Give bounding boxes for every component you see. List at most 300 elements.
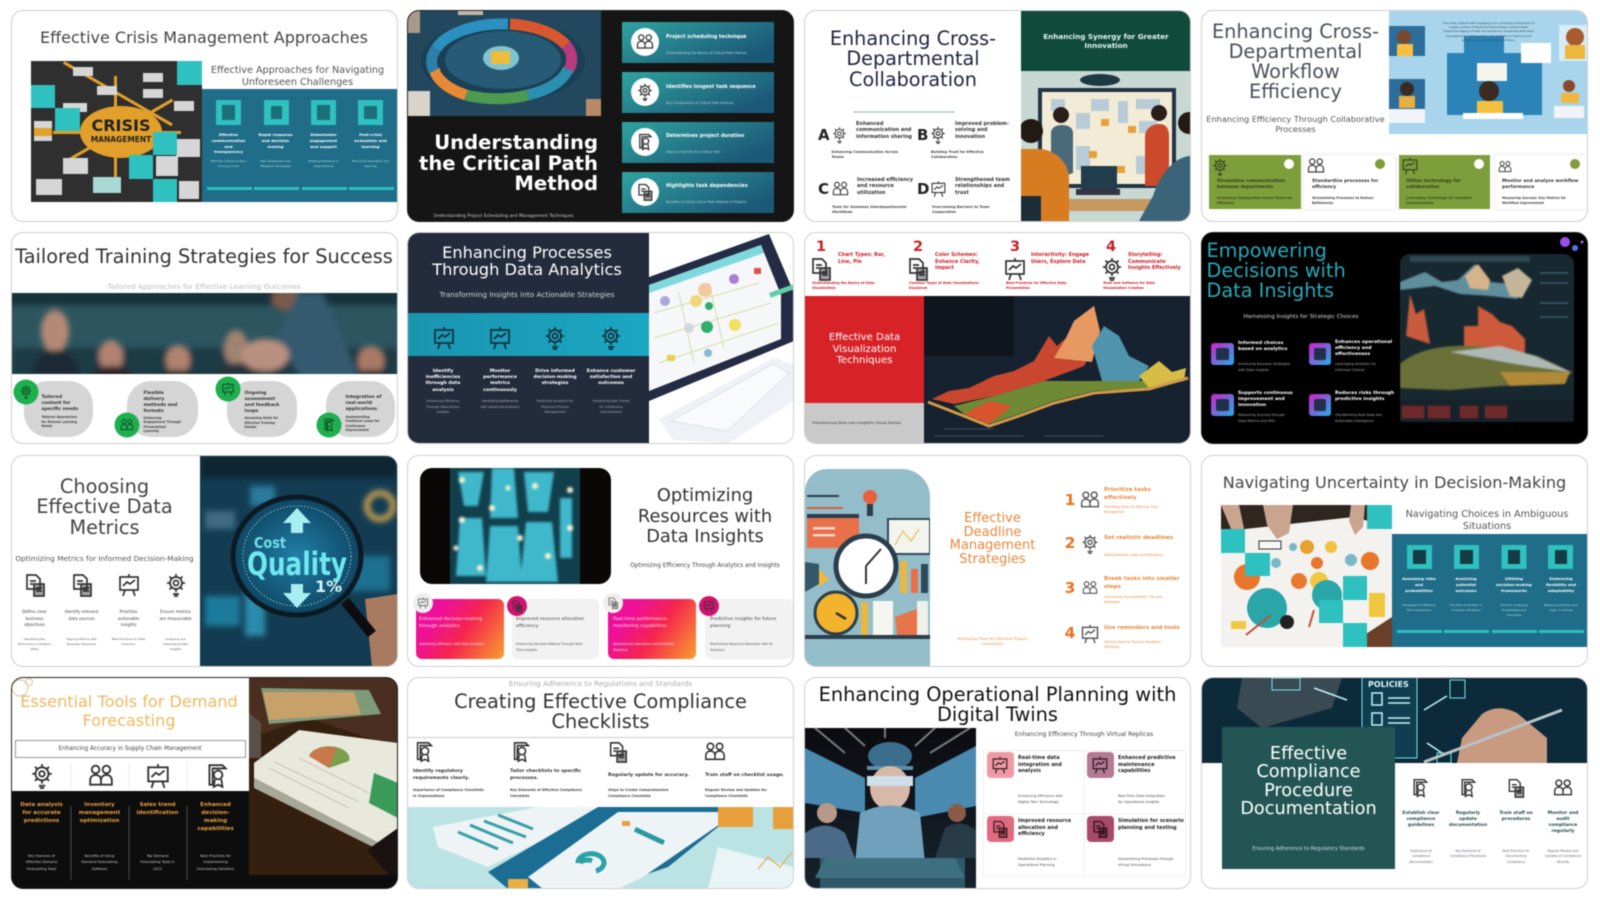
icon 2 — [1080, 534, 1100, 554]
text 4: Monitor and analyze workflow performance — [1502, 179, 1578, 190]
icon C — [832, 180, 849, 196]
icon 3 — [1004, 257, 1026, 281]
icon 3 — [545, 326, 564, 350]
card 4 — [705, 599, 793, 659]
sub C: Tools for Seamless Interdepartmental Workflows — [832, 205, 906, 214]
panel: Effective Compliance Procedure Documentation — [1201, 677, 1588, 888]
panel: Enhancing Cross-Departmental Workflow Efficiency — [1201, 10, 1588, 222]
sub 2: Enhancing Decision-Making Through Real- Time Insights — [516, 642, 583, 652]
title: Understanding the Critical Path Method — [419, 131, 598, 195]
item 2 sub: Setting Realistic Goals and Milestones — [1104, 553, 1163, 557]
sub D: Overcoming Barriers to Team Cooperation — [932, 205, 990, 214]
upper white area — [12, 678, 248, 791]
title: Essential Tools for Demand Forecasting — [20, 692, 238, 730]
image: magnifier with Quality: Cost — [254, 534, 286, 552]
image: magnifier with Quality — [200, 456, 398, 667]
list sub 1: Understanding the Basics of Critical Path Method — [666, 51, 747, 55]
label 4: Monitor and audit compliance regularly — [1548, 811, 1578, 834]
label 1: Establish clear compliance guidelines — [1402, 811, 1440, 828]
icon 2 — [88, 763, 114, 789]
photo: mind map on desk — [1221, 505, 1392, 647]
sub 1: Optimizing Efficiency with Data Analytics — [419, 642, 485, 646]
sub 3: Streamlining Operations via Predictive Modeling — [613, 642, 674, 652]
panel: teal columns: The Role of Intuition in Uncertain Situations — [1450, 603, 1482, 612]
item 4: Train staff on checklist usage. — [705, 773, 784, 778]
gradient icons — [1210, 342, 1332, 417]
icon tile 1 — [987, 752, 1014, 778]
sub 2: Benefits of Using Demand Forecasting Software — [81, 854, 118, 871]
labels: Assessing risks and probabilities — [1402, 576, 1436, 593]
icon 4 — [1498, 160, 1512, 173]
item B: Improved problem- solving and innovation — [955, 121, 1009, 140]
text 1: Enhanced decision-making through analytics — [419, 617, 482, 629]
icon 2 — [1307, 158, 1325, 174]
header text: Enhancing Synergy for Greater Innovation — [1043, 32, 1169, 50]
list text 2: Identifies longest task sequence — [666, 84, 756, 90]
item 3 sub: Assessing Skills for Effective Training Design — [244, 416, 278, 429]
sub 2: Key Elements of Compliance Procedures — [1450, 849, 1486, 858]
item 2: Set realistic deadlines — [1104, 535, 1173, 541]
number 3: 3 — [1065, 579, 1075, 597]
item 1: Chart Types: Bar, Line, Pie — [838, 252, 885, 264]
item 3: Ongoing assessment and feedback loops — [244, 391, 279, 414]
sub 1: Understanding the Basics of Data Visualization — [812, 281, 875, 290]
icon 4 — [1553, 778, 1573, 798]
photo: open report on desk — [248, 678, 398, 875]
icon 3 — [607, 597, 619, 609]
list sub 2: Key Components of Critical Path Analysis — [666, 101, 734, 105]
image: magnifier with Quality: Quality — [246, 545, 347, 583]
panel: teal columns: Post-Crisis Evaluation and Learning — [352, 159, 389, 168]
title: Enhancing Processes Through Data Analytics — [432, 243, 622, 279]
icon 4 — [1080, 624, 1100, 644]
subtitle: Transforming Insights into Actionable Strategies — [439, 290, 615, 299]
badges — [408, 591, 794, 621]
icon 1 — [1212, 158, 1228, 176]
label 1: Data analysis for accurate predictions — [20, 802, 63, 824]
image: magnifier with Quality: 1% — [314, 577, 342, 596]
icon 2 — [1091, 756, 1109, 774]
list sub 4: Benefits of Using Critical Path Method in Projects — [666, 200, 746, 204]
photo: glowing policies: POLICIES — [1368, 680, 1409, 689]
icon 4 — [704, 741, 726, 763]
label 4: Ensure metrics are measurable — [159, 609, 192, 620]
title panel — [1222, 727, 1395, 869]
sub 3: Steps to Create Comprehensive Compliance Checklists — [608, 788, 669, 798]
image: ring diagram — [407, 10, 602, 117]
letter B: B — [917, 126, 928, 144]
item 4: Reduces risks through predictive insights — [1335, 391, 1394, 402]
item 2: Tailor checklists to specific processes. — [510, 769, 581, 781]
title: Choosing Effective Data Metrics — [36, 475, 173, 539]
sublabel 2: Identifying Bottlenecks with Advanced Analytics — [480, 399, 520, 409]
title: Tailored Training Strategies for Success — [15, 245, 393, 268]
title: Effective Crisis Management Approaches — [40, 28, 368, 47]
card 3 — [1399, 155, 1490, 209]
sub 3: Top Demand Forecasting Tools in 2023 — [140, 854, 175, 871]
icon on bar 1 — [636, 34, 654, 50]
item 1: Informed choices based on analytics — [1238, 341, 1287, 352]
label: crisis text: CRISIS — [91, 116, 150, 135]
photo: glowing policies — [1202, 678, 1588, 763]
title: Effective Deadline Management Strategies — [950, 511, 1035, 567]
sublabels: Strategies for Effective Risk Assessment — [1402, 603, 1436, 612]
item 4: Storytelling: Communicate Insights Effectively — [1128, 252, 1181, 271]
icon 3 — [1506, 778, 1526, 798]
subtitle: Harnessing Insights for Strategic Choices — [1243, 314, 1359, 320]
item 2 sub: Real-Time Data Integration for Operational Insights — [1118, 794, 1165, 804]
item 2: Flexible delivery methods and formats — [144, 391, 177, 414]
title: Effective Compliance Procedure Documentation — [1240, 744, 1377, 819]
illustration: monitor and keyboard — [648, 234, 794, 443]
teal band — [408, 313, 649, 356]
decorative circles — [1559, 236, 1584, 252]
panel: Effective Data Visualization Techniques — [804, 232, 1191, 444]
item 2: Color Schemes: Enhance Clarity, Impact — [935, 252, 980, 271]
illustration: checklist tablet — [408, 807, 794, 889]
number 4: 4 — [1065, 624, 1075, 642]
letter markers: A — [818, 126, 830, 144]
list bars — [621, 21, 775, 214]
icon 1 — [434, 326, 454, 350]
checker squares — [30, 60, 203, 203]
sub 4: Tools and Software for Data Visualization Creation — [1103, 281, 1155, 290]
text 2: Standardize processes for efficiency — [1312, 179, 1378, 190]
item 3: Regularly update for accuracy. — [608, 773, 689, 778]
illustration: remote team — [1388, 10, 1588, 134]
item 1 sub: Tailored Approaches for Diverse Learning Needs — [42, 415, 77, 428]
card 2 — [1304, 155, 1395, 209]
item A: Enhanced communication and information sharing — [856, 121, 912, 140]
left background — [408, 233, 649, 444]
panel: teal columns: Analyzing potential outcomes — [1455, 576, 1477, 593]
sub 3: Best Practices for Data Collection — [112, 637, 145, 646]
panel: Empowering Decisions with Data Insights — [1201, 232, 1588, 444]
panel: teal columns: Balancing Emotion and Logic in Choices — [1544, 603, 1578, 612]
sub 3: Best Practices for Documenting Compliance — [1502, 849, 1530, 864]
item 2: Enhances operational efficiency and effectiveness — [1335, 340, 1392, 357]
icon 1 — [22, 573, 46, 597]
panel: teal columns: Rapid response and decision making — [259, 132, 292, 149]
icon 1 — [1080, 490, 1100, 510]
panel title: Effective Data Visualization Techniques — [829, 332, 900, 366]
icon 2 — [908, 257, 929, 282]
photo: crisis management — [30, 60, 203, 203]
icon tile 4 — [1087, 816, 1114, 842]
item 3 sub: Measuring Success through Data Metrics and KPIs — [1238, 413, 1285, 423]
label 3: Train staff on procedures — [1499, 811, 1533, 822]
sub 4: Best Practices for Implementing Forecasting Solutions — [197, 854, 234, 871]
item 3: Improved resource allocation and efficiency — [1018, 818, 1071, 837]
squares and bars — [1392, 534, 1588, 647]
sub A: Enhancing Communication Across Teams — [832, 150, 898, 159]
item 2 sub: Enhancing Engagement Through Personalized Learning — [144, 416, 181, 433]
panel: teal columns: Building Resilience in Organizations — [308, 159, 339, 168]
icon 4 — [164, 573, 188, 597]
item C: Increased efficiency and resource utilization — [857, 177, 913, 196]
icon A — [832, 126, 846, 144]
panel: teal columns: Stakeholder engagement and support — [310, 132, 337, 149]
text 3: Utilize technology for collaboration — [1406, 179, 1461, 190]
panel: Effective Crisis Management Approaches — [10, 10, 398, 222]
sub 4: Maximizing Resource Allocation with AI Solutions — [710, 642, 772, 652]
label 3: Sales trend identification — [137, 802, 178, 816]
icon tile 3 — [987, 816, 1014, 842]
illustration: clocks and charts — [805, 469, 930, 667]
sub 4: Regular Review and Updates for Compliance Checklists — [705, 788, 767, 798]
card 1 — [416, 599, 504, 659]
icon 2 — [490, 326, 510, 350]
icon 1 — [417, 597, 429, 609]
image: digital twin control room — [805, 728, 976, 888]
blob icon 2 — [120, 418, 134, 431]
panel: Optimizing Resources with Data Insights — [407, 455, 794, 666]
icon tile 2 — [1087, 752, 1114, 778]
subtitle: Effective Approaches for Navigating Unforeseen Challenges — [211, 65, 384, 88]
icon 3 — [1080, 580, 1100, 596]
panel: Choosing Effective Data Metrics — [10, 455, 398, 666]
item 3: Break tasks into smaller steps — [1104, 576, 1179, 590]
panel: Enhancing Operational Planning with Digital Twins — [804, 677, 1191, 888]
card 3 — [608, 599, 696, 659]
icon 4 — [204, 763, 230, 789]
number 4: 4 — [1106, 239, 1116, 255]
list text 3: Determines project duration — [666, 133, 744, 139]
subtitle: Enhancing Efficiency Through Virtual Replicas — [1015, 731, 1153, 738]
item 4 sub: Implementing Feedback Loops for Continuous Improvement — [346, 415, 380, 432]
sub 2: Common Types of Data Visualizations Explained — [909, 281, 979, 290]
blob icon 4 — [324, 418, 335, 432]
card 1 — [1209, 155, 1300, 209]
icon D — [930, 180, 946, 198]
icon 1 — [811, 257, 832, 282]
icon 4 — [601, 326, 621, 350]
icon 3 — [991, 820, 1009, 838]
blobs — [12, 376, 396, 438]
icon 2 — [511, 600, 523, 612]
sub 1: Identifying Key Performance Indicators (KPIs) — [18, 637, 51, 651]
item 1 sub: Prioritizing Tasks for Effective Time Management — [1104, 505, 1158, 514]
icon 2 — [510, 741, 532, 763]
text 3: Real-time performance monitoring capabilities — [613, 617, 667, 629]
panel: teal columns: Embracing flexibility and adaptability — [1546, 576, 1576, 593]
divider — [408, 736, 794, 738]
panel: teal columns: Post-crisis evaluation and learning — [354, 132, 387, 149]
image: 3D data landscape — [923, 295, 1191, 444]
item D: Strengthened team relationships and trust — [955, 177, 1010, 196]
sublabel 3: Predictive Analytics for Proactive Process Management — [537, 399, 573, 414]
panel: Navigating Uncertainty in Decision-Making — [1201, 455, 1588, 666]
item 4: Simulation for scenario planning and testing — [1118, 818, 1184, 831]
label 4: Enhanced decision- making capabilities — [197, 802, 234, 832]
text 2: Improved resource allocation efficiency — [516, 617, 584, 629]
sublabels: Effective Communication During a Crisis — [210, 159, 247, 168]
list text 4: Highlights task dependencies — [666, 183, 748, 189]
item 1: Identify regulatory requirements clearly. — [413, 769, 469, 781]
top caption: Ensuring Adherence to Regulations and Standards — [509, 678, 692, 688]
image: analytics dashboard — [1399, 254, 1574, 422]
divider — [853, 111, 955, 112]
sub B: Building Trust for Effective Collaboration — [931, 150, 984, 159]
footer: Understanding Project Scheduling and Management Techniques — [434, 214, 574, 219]
photo: pointing businessman — [11, 292, 398, 375]
subtitle: Optimizing Metrics for Informed Decision-Making — [15, 554, 194, 563]
label 4: Enhance customer satisfaction and outcomes — [587, 369, 635, 386]
gray text: Transforming Data into Insightful Visual Stories — [812, 420, 901, 425]
illustration: team at whiteboard — [1020, 70, 1191, 222]
title: Creating Effective Compliance Checklists — [454, 690, 747, 733]
icon 4 — [1091, 820, 1109, 838]
item 3: Interactivity: Engage Users, Explore Data — [1031, 252, 1089, 264]
panel: teal columns — [1392, 534, 1588, 647]
sub 1: Importance of Compliance Checklists in Organizations — [413, 788, 484, 798]
card 2 — [512, 599, 599, 659]
label 2: Inventory management optimization — [79, 802, 120, 824]
image: glass bottles — [420, 468, 611, 584]
subtitle: Tailored Approaches for Effective Learning Outcomes — [107, 282, 301, 291]
decorative rings — [12, 678, 36, 698]
sub 3: Best Practices for Effective Data Presentation — [1006, 281, 1066, 290]
panel: teal columns: Tools for Analyzing Probabilities and Outcomes — [1500, 603, 1528, 617]
column dividers — [12, 763, 248, 883]
panel: Tailored Training Strategies for Success — [10, 232, 398, 444]
blob icon 1 — [20, 385, 32, 400]
label 1: Identify inefficiencies through data analysis — [426, 369, 460, 393]
subtitle: Mastering Time for Effective Project Completion — [958, 636, 1027, 646]
column 1 to 4 squares and bars — [206, 100, 394, 190]
panel: Enhancing Processes Through Data Analytics — [407, 232, 794, 444]
icon 1 — [991, 756, 1009, 774]
card 4 — [1495, 155, 1587, 209]
checker squares — [1202, 456, 1588, 666]
title: Empowering Decisions with Data Insights — [1206, 239, 1346, 302]
item 4: Integration of real-world applications — [346, 395, 381, 412]
panel: teal columns — [202, 89, 398, 202]
item 1 sub: Enhancing Business Strategies with Data Insights — [1238, 362, 1290, 372]
icon 4 — [1102, 257, 1122, 282]
icon 1 — [1410, 778, 1430, 798]
item 4 sub: Transforming Raw Data into Actionable Intelligence — [1335, 413, 1382, 423]
badges — [1283, 158, 1581, 170]
item 1: Prioritize tasks effectively — [1104, 487, 1151, 501]
blob icon 3 — [222, 382, 234, 396]
letter C: C — [818, 180, 829, 198]
panel: Enhancing Cross-Departmental Collaboration — [804, 10, 1191, 222]
list sub 3: Steps to Identify the Critical Path — [666, 150, 720, 154]
sub 1: Key Features of Effective Demand Forecasting Tools — [26, 854, 57, 871]
subtitle: Optimizing Efficiency Through Analytics and Insights — [630, 563, 780, 569]
subtitle box: Enhancing Accuracy in Supply Chain Management — [58, 746, 202, 752]
icon B — [930, 126, 946, 145]
icon 1 — [413, 741, 435, 763]
sub 1: Importance of Compliance Documentation — [1409, 849, 1433, 864]
item 1: Tailored content for specific needs — [42, 395, 78, 412]
sub 3: Leveraging Technology for Seamless Communication — [1406, 196, 1472, 205]
label 2: Monitor performance metrics continuously — [483, 369, 517, 393]
icon 2 — [638, 83, 652, 102]
title: Enhancing Cross- Departmental Workflow Efficiency — [1212, 20, 1379, 103]
number 2: 2 — [913, 239, 923, 255]
sub 2: Key Elements of Effective Compliance Checklists — [510, 788, 582, 798]
title: Optimizing Resources with Data Insights — [638, 485, 772, 547]
sub 4: Measuring Success: Key Metrics for Workflow Improvement — [1502, 196, 1566, 205]
sub 1: Enhancing Collaboration Across Teams for Efficiency — [1217, 196, 1293, 205]
panel: teal columns: Risk Assessment and Mitigation Strategies — [260, 159, 291, 168]
grid frame — [982, 750, 1186, 877]
grid lines — [982, 750, 1186, 877]
icon 4 — [638, 183, 654, 202]
title: Enhancing Operational Planning with Digital Twins — [819, 683, 1176, 726]
subtitle: Enhancing Efficiency Through Collaborative Processes — [1206, 114, 1385, 134]
icon 2 — [1458, 778, 1478, 798]
item 1 sub: Enhancing Efficiency with Digital Twin Technology — [1018, 794, 1063, 804]
icon 2 — [70, 573, 94, 597]
panel: teal columns: Utilizing decision-making frameworks — [1496, 576, 1532, 593]
subtitle box — [14, 740, 246, 758]
label 1: Define clear business objectives — [22, 609, 47, 627]
title: Enhancing Cross- Departmental Collaboration — [830, 27, 996, 91]
list text 1: Project scheduling technique — [666, 34, 746, 40]
item 4 sub: Streamlining Processes through Virtual Simulations — [1118, 857, 1173, 867]
icon 3 — [638, 133, 653, 151]
panel: Creating Effective Compliance Checklists — [407, 677, 794, 888]
number 1: 1 — [1065, 491, 1075, 509]
sublabel 1: Enhancing Efficiency Through Data-Driven Insights — [426, 399, 460, 414]
label: crisis text: MANAGEMENT — [90, 135, 152, 144]
number 2: 2 — [1065, 534, 1075, 552]
label 3: Drive informed decision-making strategies — [533, 369, 577, 386]
label 2: Regularly update documentation — [1449, 811, 1487, 828]
item 2 sub: Leveraging Analytics for Informed Choices — [1335, 362, 1376, 372]
number 1: 1 — [816, 239, 826, 255]
item 3 sub: Overcoming Procrastination: Tips and Strategies — [1104, 595, 1162, 604]
panel: Understanding the Critical Path Method — [407, 10, 794, 222]
title: Navigating Uncertainty in Decision-Making — [1223, 473, 1566, 492]
sub 4: Analyzing and Interpreting Data Insights — [163, 637, 188, 651]
label 2: Identify relevant data sources — [65, 609, 98, 620]
icon 3 — [607, 741, 629, 763]
number 3: 3 — [1010, 239, 1020, 255]
icon 3 — [144, 763, 170, 789]
letter D: D — [917, 180, 929, 198]
subtitle: Ensuring Adherence to Regulatory Standards — [1252, 846, 1365, 852]
sub 2: Aligning Metrics with Business Objectives — [66, 637, 97, 646]
label 3: Prioritize actionable insights — [118, 609, 139, 627]
item 4: Use reminders and tools — [1104, 625, 1180, 631]
sub 2: Streamlining Processes to Reduce Bottlenecks — [1312, 196, 1373, 205]
text 4: Predictive insights for future planning — [710, 617, 776, 629]
header: green — [1021, 11, 1191, 71]
tiny caption on illustration: This area, topped with engaging icon, printing productivity to create a sense of technical technology compromised Grand the legacy of task and solutions, remaining with ease management. Collaboration and insights for teaming out advances in our strategic functions. — [1442, 21, 1535, 42]
sublabel 4: Visualizing Data Trends for Continuous Improvement — [592, 399, 630, 414]
item 1: Real-time data integration and analysis — [1018, 755, 1062, 774]
icon 3 — [1402, 157, 1418, 175]
label: crisis text — [90, 116, 152, 144]
subtitle: Navigating Choices in Ambiguous Situations — [1406, 509, 1568, 532]
icon 1 — [28, 763, 54, 789]
sub 4: Regular Review and Updates of Compliance Records — [1545, 849, 1581, 864]
icon 3 — [116, 573, 140, 597]
icon 4 — [703, 600, 715, 612]
gray panel — [805, 403, 924, 444]
labels: Effective communication and transparency — [212, 132, 245, 154]
item 4 sub: Utilizing Tools for Tracking Deadlines Efficiently — [1104, 640, 1160, 649]
text 1: Streamline communication between departments — [1217, 179, 1285, 190]
item 2: Enhanced predictive maintenance capabilities — [1118, 755, 1176, 774]
item 3: Supports continuous improvement and innovation — [1238, 391, 1293, 408]
item 3 sub: Predictive Analytics in Operational Planning — [1018, 857, 1057, 867]
panel: Effective Deadline Management Strategies — [804, 455, 1191, 666]
